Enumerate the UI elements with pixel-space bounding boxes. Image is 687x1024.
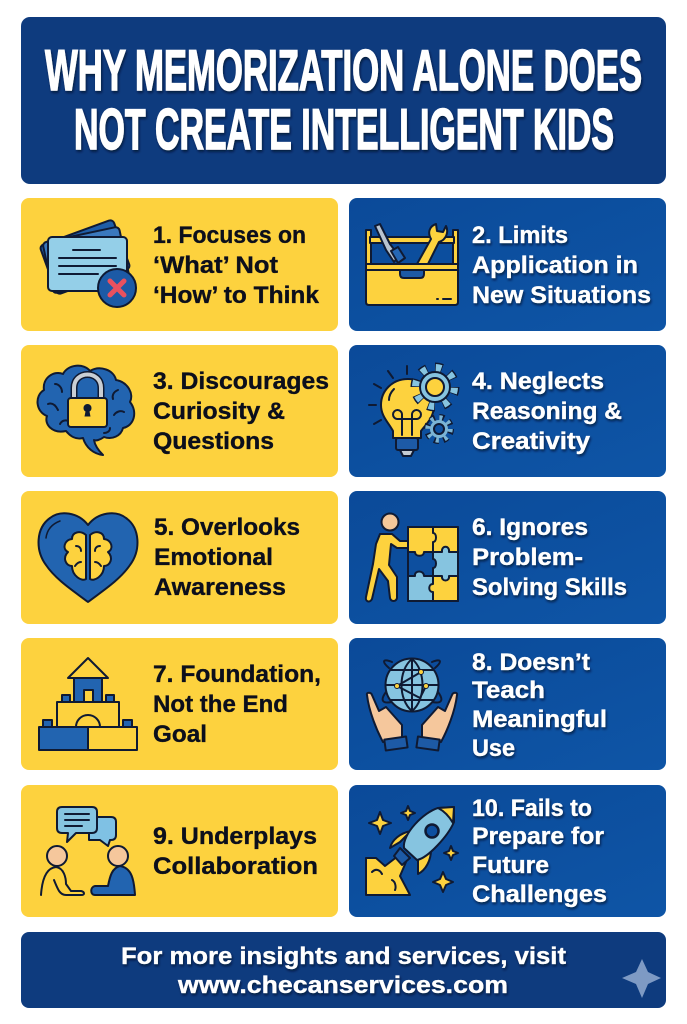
title banner bbox=[21, 17, 666, 184]
text: card 3: 3. Discourages bbox=[153, 368, 329, 395]
text: card 5: Awareness bbox=[154, 574, 286, 601]
footer text bbox=[121, 943, 566, 999]
footer text: For more insights and services, visit bbox=[121, 943, 566, 970]
text: card 5 bbox=[154, 514, 300, 601]
text: card 4: 4. Neglects bbox=[472, 368, 604, 395]
icon: building block castle bbox=[39, 658, 137, 750]
icon: sparkle bbox=[622, 959, 661, 998]
panel: card 2 bbox=[349, 198, 666, 331]
panel: card 3 bbox=[21, 345, 338, 477]
text: card 2: 2. Limits bbox=[472, 222, 568, 249]
text: card 10: Prepare for bbox=[472, 823, 604, 850]
footer banner bbox=[21, 932, 666, 1008]
text: card 10: Future bbox=[472, 852, 549, 879]
icon: rocket launch with stars bbox=[366, 806, 458, 895]
text: card 2: Application in bbox=[472, 252, 638, 279]
panel: card 10 bbox=[349, 785, 666, 917]
icon: flash cards with x bbox=[39, 219, 136, 307]
icon: light bulb and gears bbox=[369, 366, 454, 456]
text: card 8 bbox=[472, 649, 607, 762]
icon: two people talking bbox=[41, 807, 135, 895]
text: card 3: Questions bbox=[153, 428, 274, 455]
text: card 6: 6. Ignores bbox=[472, 514, 588, 541]
icon: brain with padlock bbox=[38, 366, 134, 455]
text: card 6 bbox=[472, 514, 627, 601]
footer text: www.checanservices.com bbox=[177, 972, 508, 999]
panel: card 5 bbox=[21, 491, 338, 624]
panel: card 9 bbox=[21, 785, 338, 917]
panel: card 6 bbox=[349, 491, 666, 624]
text: card 7: 7. Foundation, bbox=[153, 661, 321, 688]
text: card 7 bbox=[153, 661, 321, 748]
text: card 1 bbox=[153, 222, 319, 309]
panel: card 1 bbox=[21, 198, 338, 331]
text: card 3: Curiosity & bbox=[153, 398, 285, 425]
text: card 6: Problem- bbox=[472, 544, 583, 571]
icon: person assembling puzzle bbox=[366, 514, 458, 601]
text: card 1: ‘What’ Not bbox=[153, 252, 278, 279]
text: card 10: Challenges bbox=[472, 881, 607, 908]
text: card 8: 8. Doesn’t bbox=[472, 649, 590, 676]
text: card 3 bbox=[153, 368, 329, 455]
text: card 10 bbox=[472, 795, 607, 908]
panel: card 4 bbox=[349, 345, 666, 477]
text: card 5: 5. Overlooks bbox=[154, 514, 300, 541]
text: card 5: Emotional bbox=[154, 544, 273, 571]
icon: globe held by hands bbox=[367, 658, 457, 750]
text: card 7: Not the End bbox=[153, 691, 288, 718]
panel: card 7 bbox=[21, 638, 338, 770]
panel: card 8 bbox=[349, 638, 666, 770]
text: card 4 bbox=[472, 368, 622, 455]
text: card 7: Goal bbox=[153, 721, 207, 748]
text: card 8: Meaningful bbox=[472, 706, 607, 733]
text: card 6: Solving Skills bbox=[472, 574, 627, 601]
text: card 8: Use bbox=[472, 735, 515, 762]
text: card 10: 10. Fails to bbox=[472, 795, 592, 822]
text: card 2 bbox=[472, 222, 651, 309]
text: card 9: Collaboration bbox=[153, 853, 318, 880]
text: card 4: Creativity bbox=[472, 428, 590, 455]
text: card 1: ‘How’ to Think bbox=[153, 282, 319, 309]
text: card 4: Reasoning & bbox=[472, 398, 622, 425]
icon: toolbox bbox=[366, 224, 458, 305]
title text bbox=[45, 39, 642, 162]
text: card 9 bbox=[153, 823, 318, 880]
text: card 8: Teach bbox=[472, 677, 545, 704]
icon: heart with brain bbox=[39, 513, 137, 602]
text: card 9: 9. Underplays bbox=[153, 823, 317, 850]
text: card 2: New Situations bbox=[472, 282, 651, 309]
text: card 1: 1. Focuses on bbox=[153, 222, 306, 249]
